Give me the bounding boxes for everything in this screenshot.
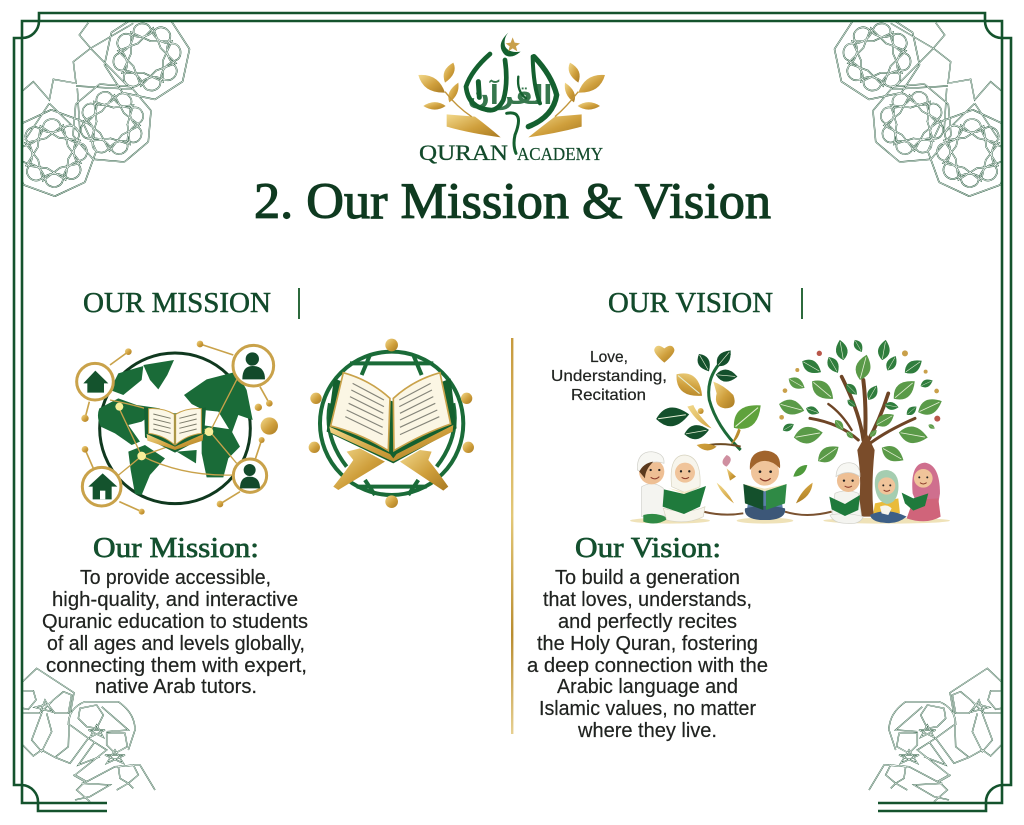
gold vertical divider	[511, 338, 513, 734]
paragraph: mission statement: of all ages and levels globally,	[47, 632, 305, 655]
callout: love, understanding, recitation	[551, 349, 667, 404]
tree	[777, 338, 945, 517]
corner ornament: bottom right	[869, 668, 1001, 802]
wordmark: QURAN: QURAN	[419, 140, 508, 165]
panel text: mission	[42, 533, 308, 698]
heading: OUR MISSION: OUR MISSION	[83, 287, 271, 319]
globe	[98, 353, 253, 504]
paragraph: vision statement: Arabic language and	[557, 675, 738, 698]
icon: open Quran on stand with globe	[309, 339, 474, 508]
child: girl in white hijab reading	[663, 455, 706, 522]
icon: globe with connected students and tutors	[77, 341, 278, 515]
paragraph: vision statement: the Holy Quran, fostering	[537, 632, 758, 655]
house node top	[77, 363, 113, 400]
open book	[327, 373, 457, 463]
subheading: Our Mission: Our Mission:	[93, 533, 259, 564]
paragraph: mission statement: native Arab tutors.	[95, 675, 257, 698]
paragraph: vision statement: that loves, understands,	[543, 588, 752, 611]
paragraph: vision statement: where they live.	[577, 719, 717, 742]
child: girl in pink hijab with book	[902, 463, 941, 521]
small gold swirls and sprigs	[717, 455, 813, 503]
gold nodes	[309, 339, 474, 508]
person node top	[233, 345, 274, 386]
callout line: Love: Love,	[590, 349, 628, 366]
child: girl in green hijab	[870, 470, 907, 523]
paragraph: mission statement: To provide accessible,	[80, 566, 271, 589]
callout line: Recitation: Recitation	[571, 387, 646, 404]
corner ornament: top left	[23, 22, 190, 197]
panel text: vision	[527, 533, 768, 742]
paragraph: mission statement: Quranic education to students	[42, 610, 308, 633]
icon: gold laurel and calligraphy emblem	[418, 33, 605, 153]
arabic wordmark: القرآن	[468, 79, 552, 111]
paragraph: mission statement	[42, 566, 308, 698]
child: boy in white cap with book	[829, 463, 863, 524]
paragraph: mission statement: connecting them with expert,	[46, 654, 307, 677]
callout line: Understanding: Understanding,	[551, 368, 667, 385]
wordmark: ACADEMY: ACADEMY	[517, 144, 603, 164]
vine with leaves	[655, 347, 767, 450]
paragraph: vision statement: To build a generation	[555, 566, 740, 589]
ground shadows and root	[630, 512, 950, 524]
title: 2. Our Mission & Vision	[254, 174, 771, 230]
paragraph: mission statement: high-quality, and interactive	[52, 588, 298, 611]
logo: Quran Academy	[418, 33, 605, 165]
subheading: Our Vision: Our Vision:	[575, 533, 721, 564]
person node bottom	[233, 459, 267, 492]
paragraph: vision statement	[527, 566, 768, 742]
book stand	[333, 448, 448, 491]
paragraph: vision statement: a deep connection with the	[527, 654, 768, 677]
corner ornament: bottom left	[23, 668, 155, 802]
corner ornament: top right	[834, 22, 1001, 197]
child: boy with green book	[743, 451, 787, 520]
heading separator: mission	[298, 288, 300, 319]
heading separator: vision	[801, 288, 803, 319]
child: boy in white cap	[637, 452, 668, 524]
heading: OUR VISION: OUR VISION	[608, 287, 773, 319]
house node bottom	[82, 467, 121, 506]
illustration: tree, vine and children reading	[630, 338, 950, 524]
paragraph: vision statement: and perfectly recites	[558, 610, 737, 633]
icon: gold heart	[654, 346, 674, 363]
connector lines and gold dots	[81, 341, 278, 515]
wire globe	[320, 352, 463, 495]
paragraph: vision statement: Islamic values, no matter	[539, 697, 756, 720]
open book on globe	[144, 407, 206, 453]
